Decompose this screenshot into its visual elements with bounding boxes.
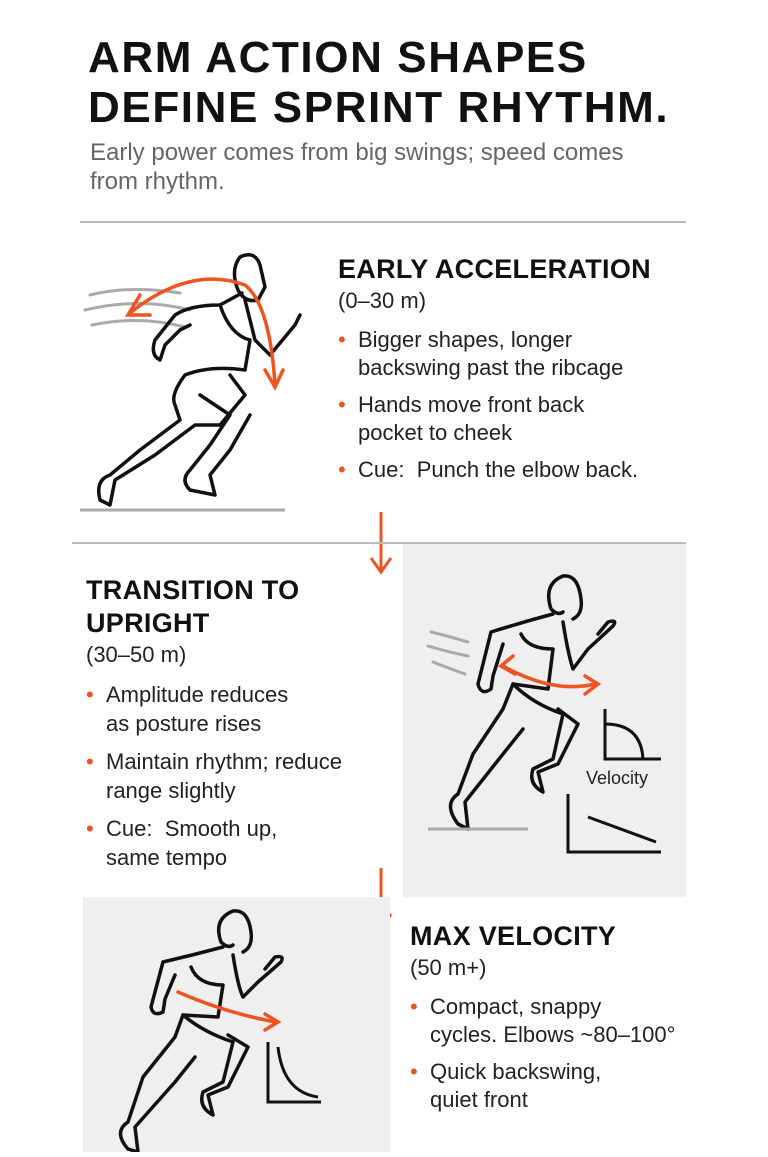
- section: early acceleration text: [338, 254, 651, 482]
- title: ARM ACTION SHAPES: [88, 33, 588, 82]
- bullets: pocket to cheek: [358, 420, 512, 445]
- title: DEFINE SPRINT RHYTHM.: [88, 83, 669, 132]
- bullets: [410, 994, 675, 1112]
- distance: (30–50 m): [86, 642, 186, 667]
- bullets: [86, 682, 342, 870]
- bullets: Compact, snappy: [430, 994, 601, 1019]
- heading: [86, 575, 299, 638]
- heading: TRANSITION TO: [86, 575, 299, 605]
- subtitle: [90, 139, 624, 195]
- bullets: as posture rises: [106, 711, 261, 736]
- bullets: [338, 327, 638, 482]
- bullets: Quick backswing,: [430, 1059, 601, 1084]
- heading: EARLY ACCELERATION: [338, 254, 651, 284]
- section: transition text: [86, 575, 342, 870]
- bullets: same tempo: [106, 845, 227, 870]
- panel: transition illustration: [403, 544, 686, 897]
- subtitle: from rhythm.: [90, 168, 225, 195]
- heading: MAX VELOCITY: [410, 921, 616, 951]
- heading: UPRIGHT: [86, 608, 210, 638]
- bullets: quiet front: [430, 1087, 528, 1112]
- title: [88, 33, 669, 132]
- arrow: to transition: [370, 512, 392, 574]
- bullets: Bigger shapes, longer: [358, 327, 572, 352]
- bullets: Cue: Smooth up,: [106, 816, 277, 841]
- bullets: Amplitude reduces: [106, 682, 288, 707]
- arrow: to max velocity: [380, 868, 392, 918]
- section: max velocity text: [410, 921, 675, 1112]
- bullets: backswing past the ribcage: [358, 355, 623, 380]
- illustration: early acceleration runner: [80, 253, 302, 512]
- panel: transition illustration: Velocity: [586, 768, 648, 788]
- bullets: range slightly: [106, 778, 236, 803]
- distance: (0–30 m): [338, 288, 426, 313]
- bullets: Cue: Punch the elbow back.: [358, 457, 638, 482]
- bullets: Maintain rhythm; reduce: [106, 749, 342, 774]
- bullets: Hands move front back: [358, 392, 584, 417]
- subtitle: Early power comes from big swings; speed comes: [90, 139, 624, 166]
- panel: max velocity illustration: [83, 897, 390, 1152]
- bullets: cycles. Elbows ~80–100°: [430, 1022, 675, 1047]
- distance: (50 m+): [410, 955, 486, 980]
